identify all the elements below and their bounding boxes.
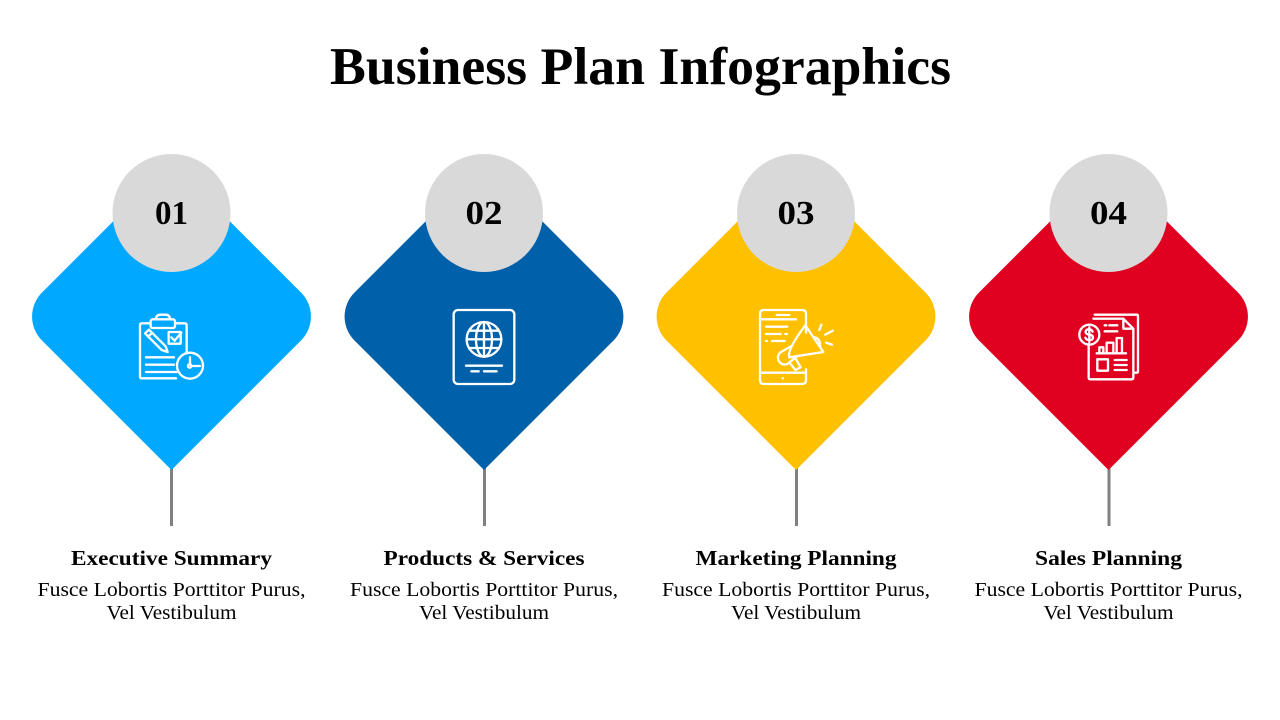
icon: sales report — [1079, 315, 1138, 379]
description: Fusce Lobortis Porttitor Purus, — [662, 579, 930, 601]
description: Fusce Lobortis Porttitor Purus, — [350, 579, 618, 601]
connector line — [483, 466, 486, 526]
description: Vel Vestibulum — [1044, 602, 1174, 624]
panel: products and services — [345, 154, 623, 624]
number circle — [425, 154, 543, 272]
panel: executive summary — [32, 154, 311, 624]
number: 02 — [466, 195, 502, 232]
number circle — [112, 154, 230, 272]
heading: Marketing Planning — [696, 546, 897, 570]
diamond — [657, 163, 935, 470]
panel: marketing planning — [657, 154, 935, 624]
heading: Products & Services — [384, 546, 584, 570]
number circle — [1050, 154, 1168, 272]
description: Vel Vestibulum — [731, 602, 861, 624]
diamond — [345, 163, 623, 470]
connector line — [795, 466, 798, 526]
description: Vel Vestibulum — [419, 602, 549, 624]
number: 03 — [778, 195, 814, 232]
icon: passport — [454, 310, 514, 384]
description: Fusce Lobortis Porttitor Purus, — [974, 579, 1242, 601]
heading: Executive Summary — [71, 546, 273, 570]
diamond — [32, 163, 311, 470]
number: 01 — [155, 195, 188, 232]
icon: phone with megaphone — [760, 310, 833, 384]
connector line — [170, 466, 173, 526]
description: Fusce Lobortis Porttitor Purus, — [38, 579, 306, 601]
description: Vel Vestibulum — [106, 602, 237, 624]
number: 04 — [1090, 195, 1127, 232]
number circle — [737, 154, 855, 272]
panel: sales planning — [969, 154, 1248, 624]
diamond — [969, 163, 1248, 470]
icon: clipboard with clock — [140, 315, 203, 379]
connector line — [1108, 466, 1110, 526]
title: Business Plan Infographics — [330, 38, 951, 96]
heading: Sales Planning — [1035, 546, 1183, 570]
